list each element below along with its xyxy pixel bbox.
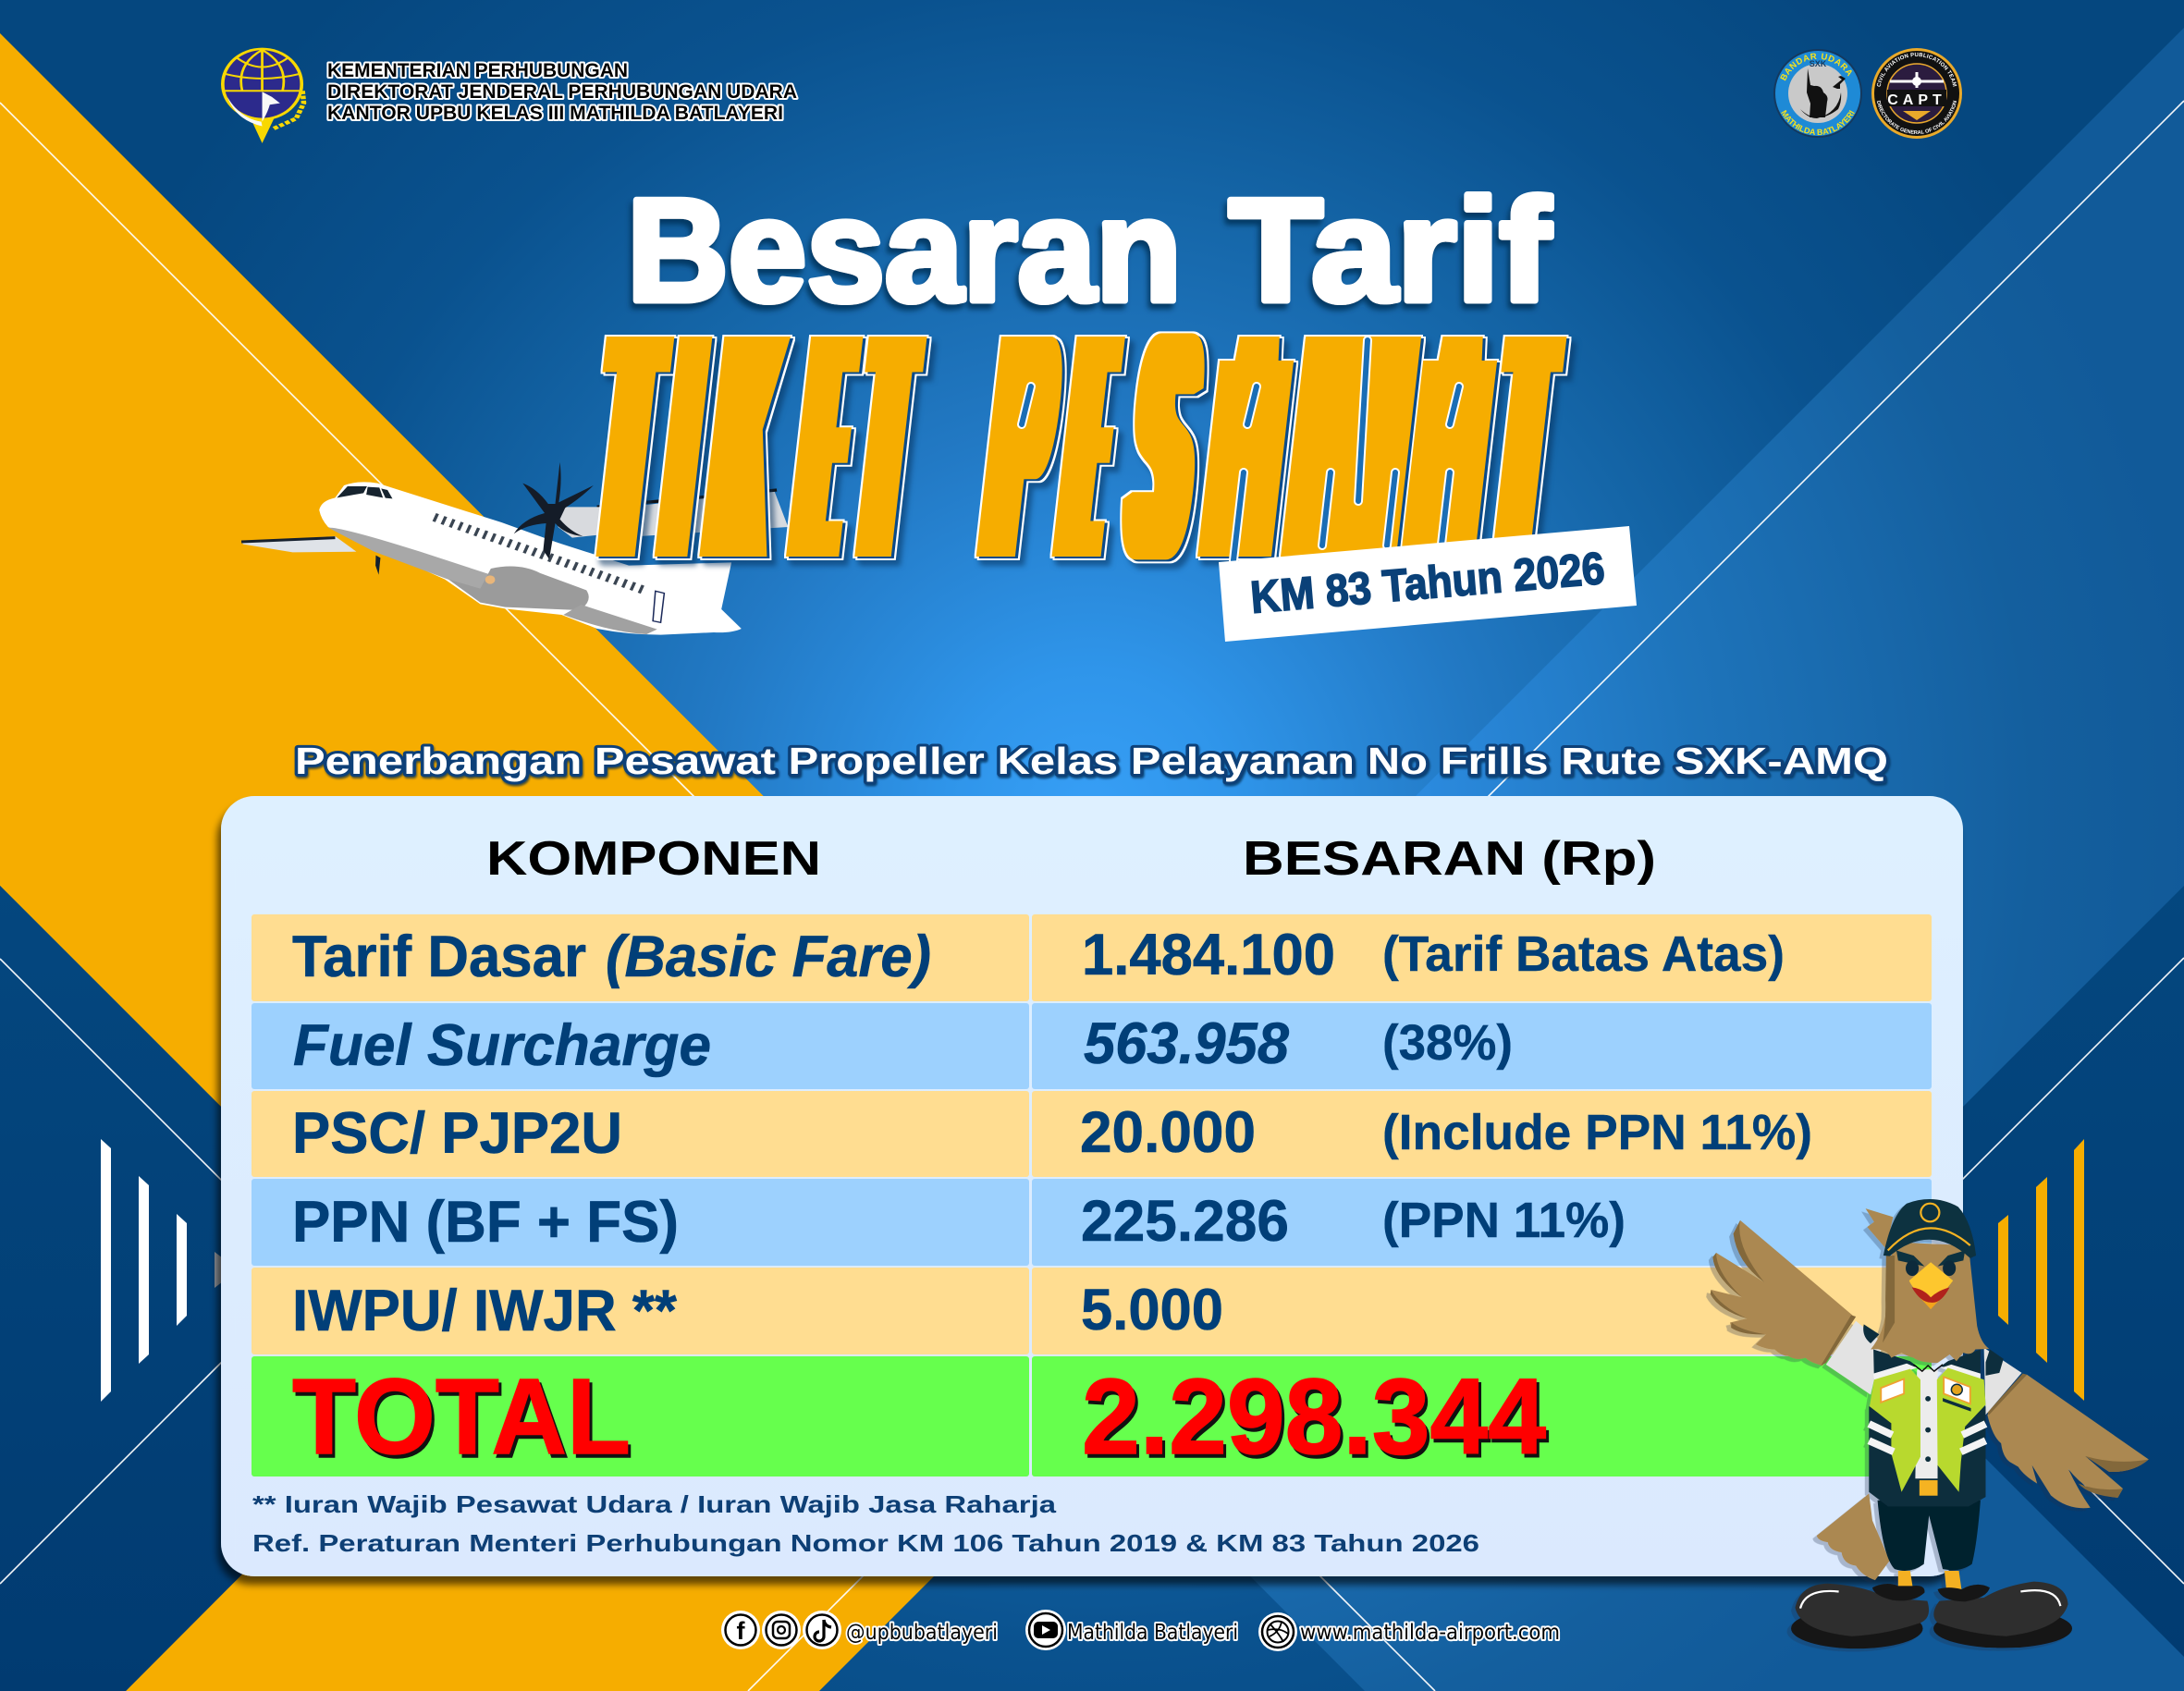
total value: 2.298.344 — [1082, 1356, 1546, 1477]
airport badge: MATHILDA BATLAYERI — [1781, 109, 1855, 135]
handle: @upbubatlayeri — [846, 1621, 998, 1645]
logo tail — [249, 114, 276, 143]
logo globe — [221, 48, 303, 120]
logo bird — [227, 92, 280, 127]
row notes: (PPN 11%) — [1382, 1193, 1626, 1248]
background: yellow diagonal shape left — [0, 33, 1239, 1691]
aircraft illustration — [241, 462, 788, 635]
heavy condensed lettering: W — [1291, 269, 1418, 627]
ministry logo — [221, 48, 304, 143]
row labels: Tarif Dasar — [292, 925, 586, 989]
shoe collars — [1872, 1584, 1990, 1601]
cap — [1883, 1199, 1976, 1258]
regulation tag: KM 83 Tahun 2026 — [1248, 544, 1607, 623]
column heading: komponen: KOMPONEN — [486, 832, 821, 886]
vest body — [1869, 1406, 1985, 1506]
eyes — [1906, 1260, 1956, 1276]
mascot: eagle in uniform — [1711, 1199, 2149, 1648]
heavy condensed lettering: E — [1060, 269, 1123, 627]
cap emblem — [1920, 1204, 1939, 1221]
heavy condensed lettering: P — [982, 269, 1066, 627]
headlight — [485, 575, 495, 584]
column heading: besaran: BESARAN (Rp) — [1243, 832, 1656, 886]
aft door — [653, 591, 664, 622]
website address: www.mathilda-airport.com — [1300, 1621, 1560, 1645]
icon: youtube — [1025, 1610, 1066, 1650]
vest badges — [1881, 1379, 1904, 1403]
cabin windows — [435, 517, 646, 591]
row values: 20.000 — [1080, 1100, 1256, 1165]
neck shading — [1883, 1256, 1895, 1342]
row values: 5.000 — [1081, 1278, 1223, 1342]
title: Besaran Tarif — [627, 169, 1551, 332]
heavy condensed lettering: A — [1411, 269, 1496, 627]
airport badge — [1773, 49, 1862, 138]
CAPT badge: DIRECTORATE GENERAL OF CIVIL AVIATION — [1877, 100, 1957, 134]
row notes: (Include PPN 11%) — [1382, 1105, 1812, 1160]
footnotes — [252, 1490, 1479, 1557]
fin — [495, 522, 731, 612]
buttons — [1925, 1396, 1931, 1462]
cap trim — [1888, 1228, 1970, 1251]
icon: website — [1258, 1612, 1297, 1651]
left wing — [1711, 1220, 1855, 1366]
wing root sponson — [448, 567, 589, 610]
title: TIKET PESAWAT — [591, 269, 1564, 627]
vest shoulders — [1873, 1350, 1981, 1379]
heavy condensed lettering — [591, 269, 1564, 627]
title: Besaran Tarif: Tarif — [1229, 169, 1551, 332]
footer social links — [721, 1610, 1560, 1651]
eyebrows — [1896, 1251, 1965, 1267]
regulation tag — [1219, 526, 1637, 642]
background: dark triangle right — [1798, 886, 2184, 1657]
right wing shading — [1987, 1374, 2149, 1498]
row notes: (38%) — [1382, 1015, 1513, 1071]
belt buckle — [1920, 1480, 1938, 1496]
far wing — [576, 490, 788, 536]
channel name: Mathilda Batlayeri — [1067, 1621, 1238, 1645]
shoes — [1791, 1582, 2072, 1648]
fuselage — [319, 482, 742, 635]
heavy condensed lettering: K — [706, 269, 789, 627]
CAPT badge: CIVIL AVIATION PUBLICATION TEAM — [1877, 52, 1957, 87]
small prop blade — [375, 556, 380, 575]
propeller — [514, 462, 594, 559]
logo grid lines — [225, 50, 300, 91]
row labels: PPN (BF + FS) — [292, 1190, 679, 1255]
row values: 1.484.100 — [1082, 923, 1335, 987]
icon: facebook — [721, 1611, 760, 1649]
legs — [1898, 1571, 1962, 1590]
engine — [558, 507, 602, 538]
lower beak — [1919, 1296, 1943, 1309]
icon: instagram — [762, 1611, 801, 1649]
ministry header text: KEMENTERIAN PERHUBUNGAN — [327, 60, 628, 81]
row labels: IWPU/ IWJR ** — [292, 1279, 677, 1343]
head and neck — [1871, 1242, 1989, 1363]
yellow chevron stripes right — [1998, 1139, 2084, 1401]
shirt front — [1915, 1369, 1938, 1478]
logo gear — [272, 91, 304, 129]
panel: fare table — [221, 796, 1963, 1576]
heavy condensed lettering: I — [663, 269, 710, 627]
white chevron stripes left — [101, 1139, 227, 1402]
row notes: (Tarif Batas Atas) — [1382, 926, 1785, 982]
row labels — [292, 925, 931, 1343]
row values: 563.958 — [1084, 1011, 1289, 1076]
crest feather — [1866, 1208, 1893, 1249]
CAPT badge — [1871, 48, 1962, 139]
row values — [1080, 923, 1335, 1342]
trousers — [1878, 1501, 1981, 1571]
subtitle: Penerbangan Pesawat Propeller Kelas Pelayanan No Frills Rute SXK-AMQ — [295, 740, 1888, 782]
reflective stripes — [1869, 1424, 1985, 1452]
ministry header text: DIREKTORAT JENDERAL PERHUBUNGAN UDARA — [327, 81, 797, 103]
heavy condensed lettering: T — [853, 269, 924, 627]
airport badge: SXK — [1810, 59, 1827, 68]
ministry header text: KANTOR UPBU KELAS III MATHILDA BATLAYERI — [327, 103, 783, 124]
footnotes: ** Iuran Wajib Pesawat Udara / Iuran Wajib Jasa Raharja — [252, 1490, 1057, 1518]
airport badge: BANDAR UDARA — [1780, 54, 1852, 81]
shirt sleeves — [1826, 1321, 2021, 1415]
right wing — [1987, 1375, 2149, 1508]
footnotes: Ref. Peraturan Menteri Perhubungan Nomor KM 106 Tahun 2019 & KM 83 Tahun 2026 — [252, 1529, 1479, 1557]
letter counters — [1022, 340, 1459, 560]
heavy condensed lettering: T — [591, 269, 671, 627]
ministry header text — [327, 60, 797, 124]
row values: 225.286 — [1081, 1189, 1289, 1254]
wing shading — [1711, 1220, 1856, 1366]
infographic canvas: T — [1490, 269, 1564, 627]
sleeve patches — [1863, 1324, 2004, 1376]
panel background — [221, 796, 1963, 1576]
hi-vis vest panels — [1870, 1367, 1985, 1492]
background: dark triangle left — [0, 886, 465, 1691]
row labels: (Basic Fare) — [606, 925, 931, 989]
tail feathers — [1817, 1494, 1890, 1580]
heavy condensed lettering: A — [1208, 269, 1293, 627]
rear belly — [563, 605, 657, 634]
cockpit windows — [337, 486, 392, 498]
heavy condensed lettering: E — [793, 269, 862, 627]
icon: facebook: f — [736, 1617, 745, 1645]
background: lighter right diagonal band — [943, 28, 2184, 1691]
total label: TOTAL — [292, 1356, 631, 1477]
collar — [1914, 1365, 1943, 1371]
row labels: PSC/ PJP2U — [292, 1101, 622, 1166]
row backgrounds — [252, 914, 1932, 1477]
heavy condensed lettering: S — [1124, 269, 1209, 627]
belly — [328, 528, 491, 590]
icon: tiktok — [803, 1611, 841, 1649]
beak — [1909, 1262, 1953, 1309]
row notes — [1382, 926, 1812, 1248]
mouth — [1912, 1287, 1950, 1303]
CAPT badge: CAPT — [1887, 92, 1946, 108]
title: Besaran Tarif: Besaran — [627, 169, 1182, 332]
near wing — [241, 536, 356, 552]
row labels: Fuel Surcharge — [293, 1013, 711, 1078]
